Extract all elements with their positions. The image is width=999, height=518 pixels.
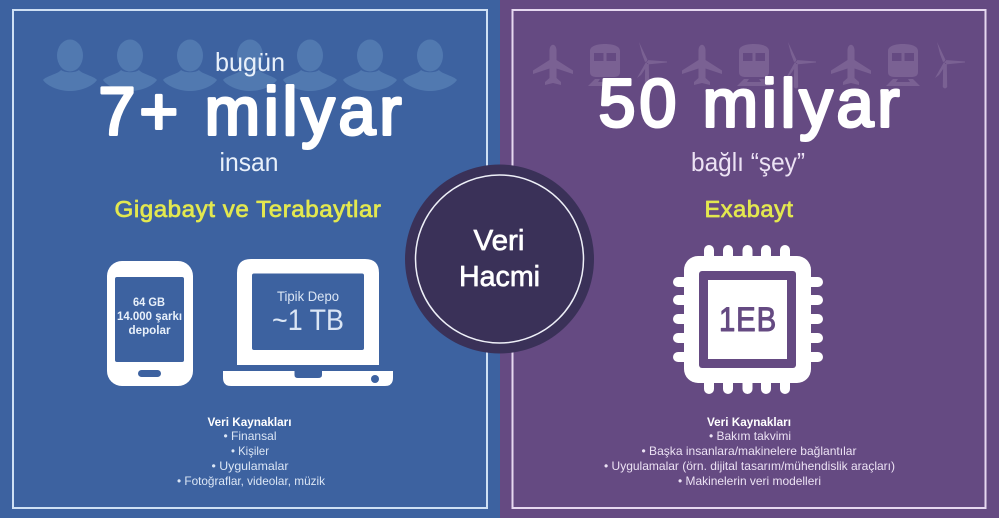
heading: Gigabayt ve Terabaytlar: Gigabayt ve Terabaytlar [114, 196, 382, 222]
text: left data sources: • Fotoğraflar, videolar, müzik [177, 474, 326, 488]
text: left data sources: Veri Kaynakları [208, 415, 292, 429]
text: bağlı şey: bağlı “şey” [691, 147, 805, 177]
panel: blue background [0, 0, 500, 518]
panel: left frame [13, 10, 487, 508]
icon: laptop [223, 259, 393, 386]
text: left data sources: • Uygulamalar [212, 459, 288, 473]
icons: planes, trains and wind turbines [533, 42, 965, 88]
heading: 50 milyar: 50 milyar [598, 66, 904, 142]
panel: right frame [512, 10, 986, 508]
text: 1EB: 1EB [719, 301, 777, 339]
text: phone capacity: 14.000 şarkı [117, 309, 182, 323]
text: right data sources: • Uygulamalar (örn. dijital tasarım/mühendislik araçları) [604, 459, 895, 473]
text: laptop capacity [272, 289, 344, 337]
text: phone capacity [117, 295, 182, 337]
text: insan: insan [220, 147, 278, 177]
text: left data sources: • Kişiler [231, 444, 269, 458]
text: left data sources [177, 415, 326, 488]
icon: chip 1EB [673, 245, 823, 394]
text: Veri Hacmi: Veri [474, 225, 524, 257]
text: right data sources [604, 415, 895, 488]
text: laptop capacity: Tipik Depo [277, 289, 339, 304]
text: right data sources: • Başka insanlara/makinelere bağlantılar [642, 444, 856, 458]
text: right data sources: Veri Kaynakları [707, 415, 791, 429]
text: bugün: bugün [215, 47, 285, 77]
text: phone capacity: 64 GB [133, 295, 165, 309]
text: right data sources: • Makinelerin veri modelleri [678, 474, 821, 488]
text: Veri Hacmi [459, 225, 540, 293]
badge: Veri Hacmi [405, 164, 594, 354]
text: laptop capacity: ~1 TB [272, 304, 344, 337]
icons: row of people [43, 40, 457, 91]
heading: Exabayt: Exabayt [704, 196, 794, 222]
text: phone capacity: depolar [128, 323, 171, 337]
icon: phone [107, 261, 193, 386]
panel: purple background [500, 0, 999, 518]
text: left data sources: • Finansal [224, 429, 276, 443]
text: Veri Hacmi: Hacmi [459, 261, 540, 293]
heading: 7+ milyar: 7+ milyar [98, 74, 406, 150]
text: right data sources: • Bakım takvimi [709, 429, 791, 443]
